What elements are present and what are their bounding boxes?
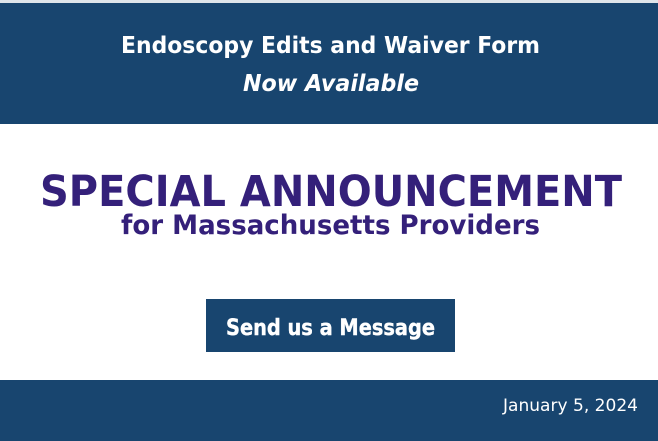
button: send us a message <box>206 299 455 352</box>
title: special announcement: SPECIAL ANNOUNCEMENT <box>40 167 623 217</box>
button: send us a message: Send us a Message <box>226 316 435 341</box>
date: January 5, 2024 <box>502 396 638 415</box>
subtitle: massachusetts providers: for Massachusetts Providers <box>121 210 540 241</box>
heading: endoscopy edits: Endoscopy Edits and Waiver Form <box>121 33 540 59</box>
panel: top banner <box>0 3 658 124</box>
top edge strip <box>0 0 658 3</box>
subheading: now available: Now Available <box>243 71 419 97</box>
panel: footer banner <box>0 380 658 441</box>
